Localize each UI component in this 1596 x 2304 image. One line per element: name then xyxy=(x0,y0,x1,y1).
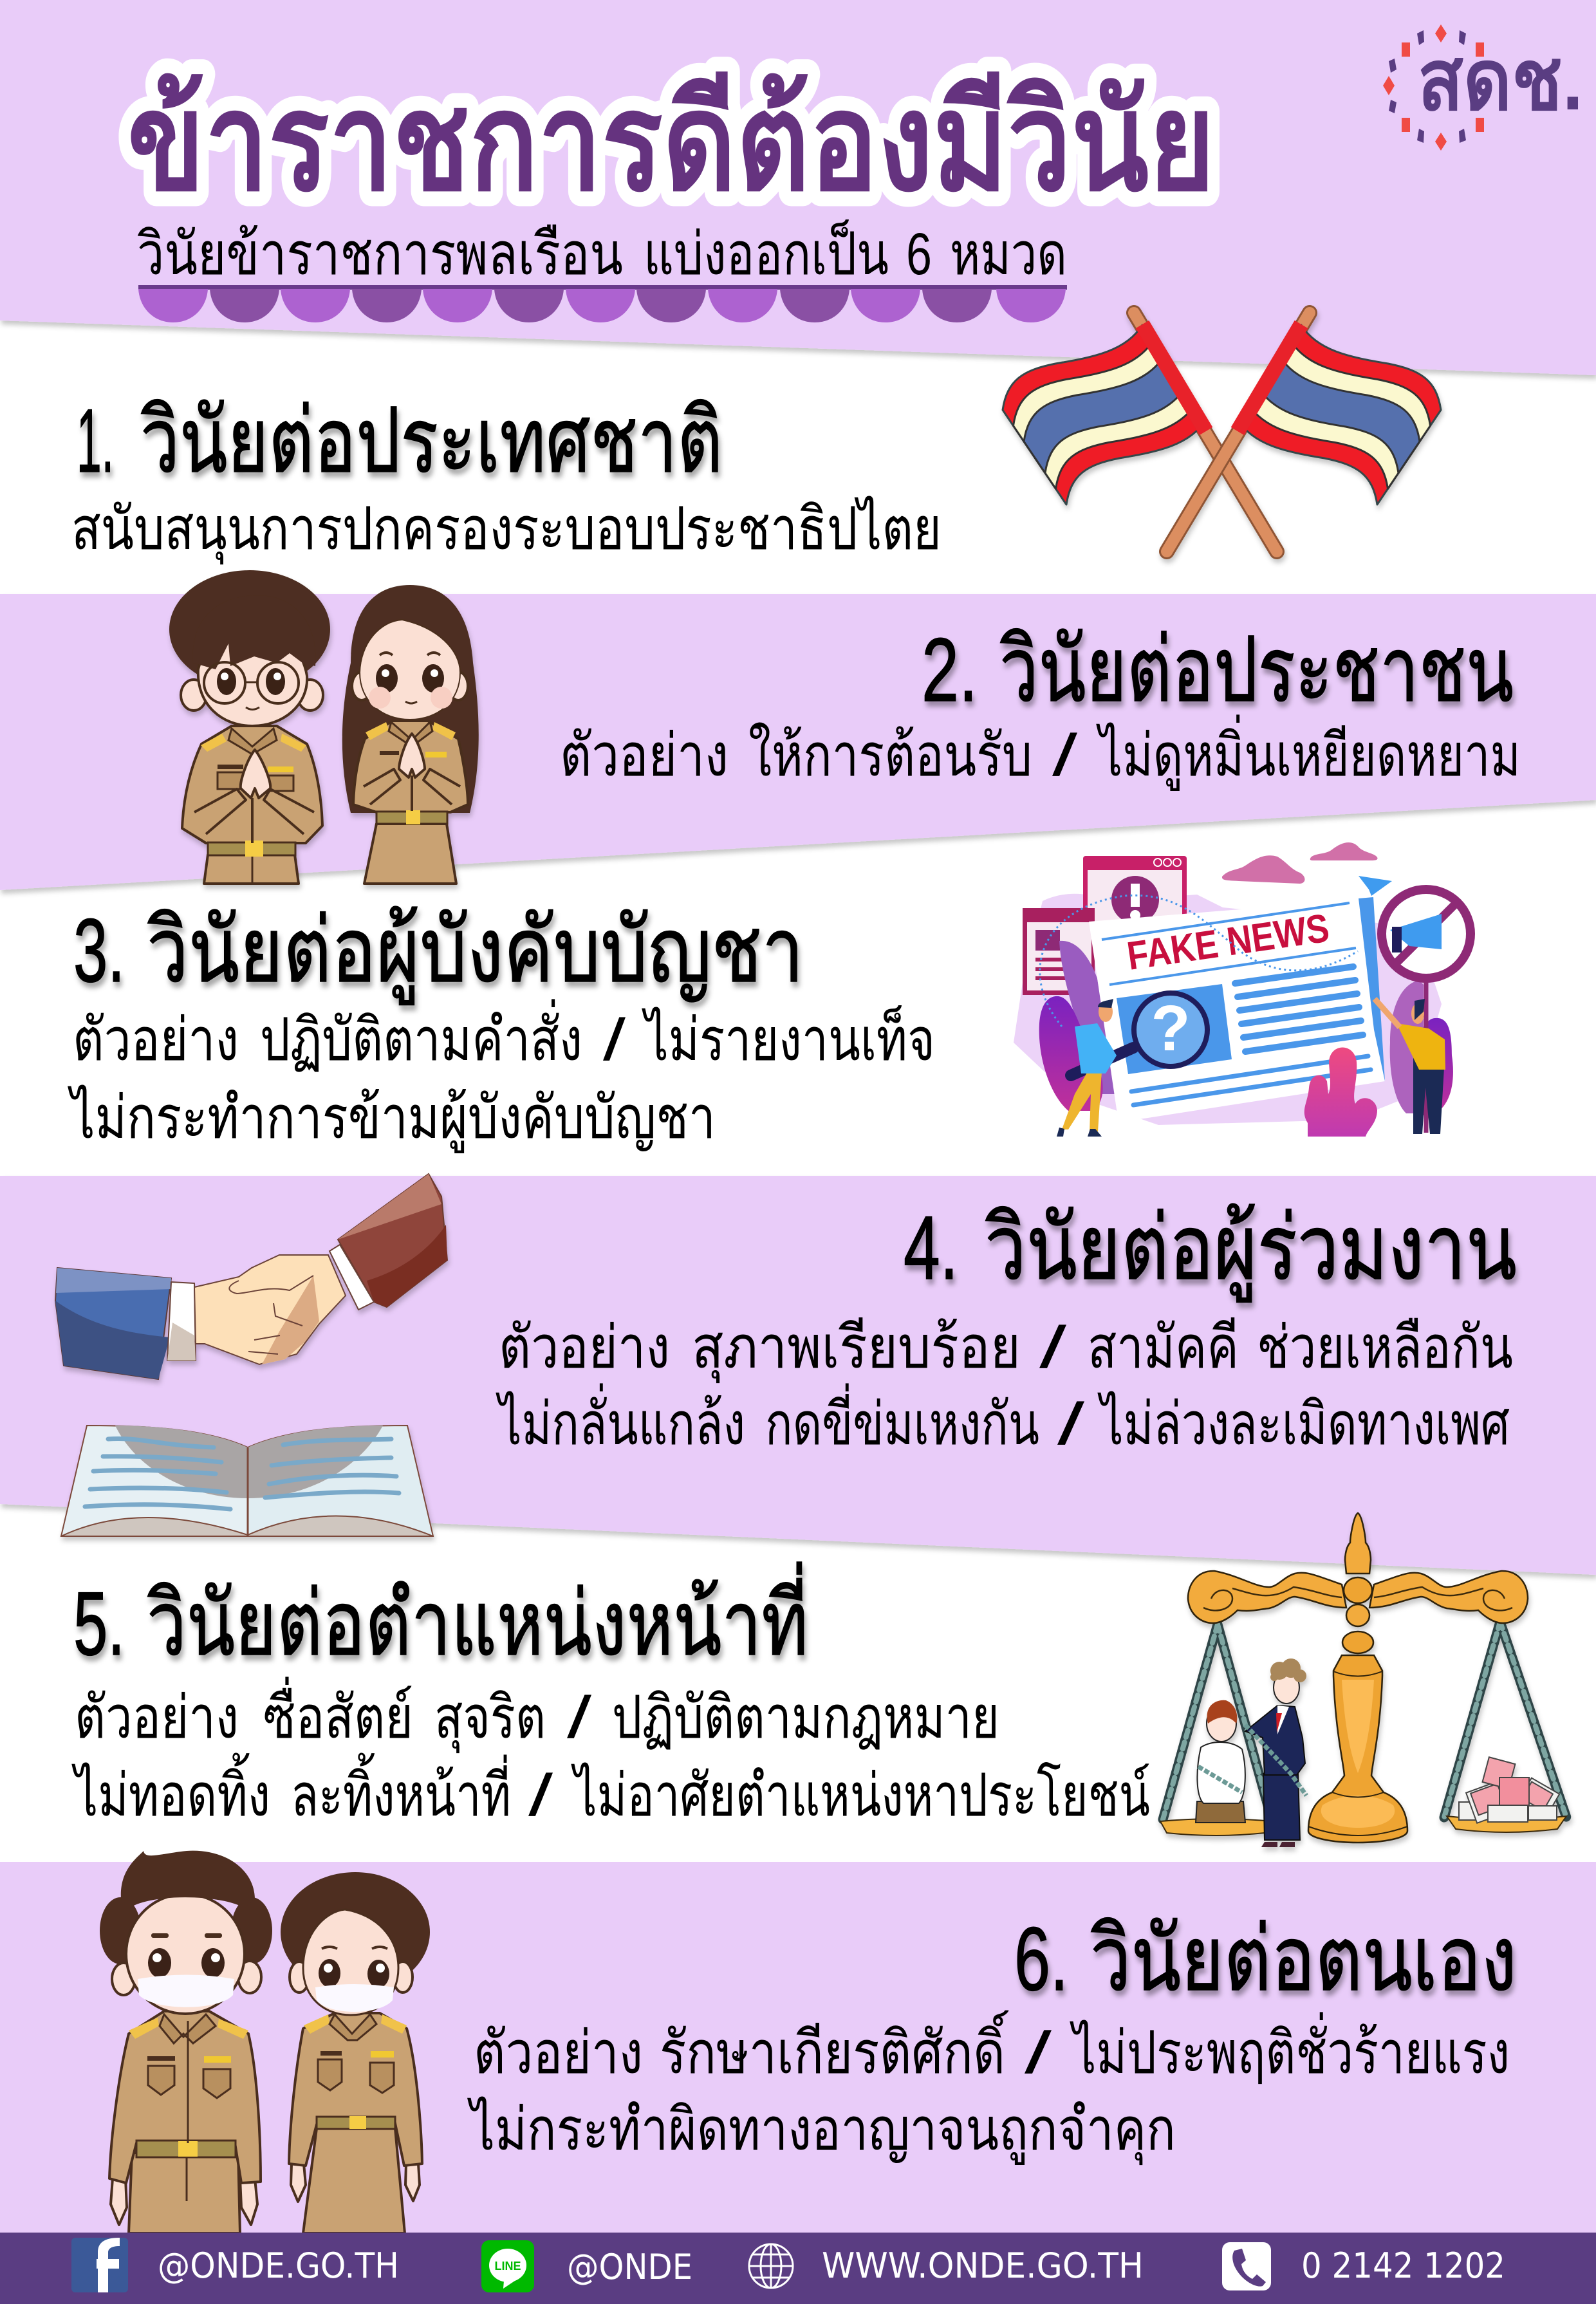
text: section 5 body line 1: ตัวอย่าง xyxy=(75,1685,239,1751)
text: line handle: @ONDE xyxy=(567,2247,692,2287)
chains xyxy=(1163,1622,1566,1819)
icon: phone xyxy=(1222,2242,1271,2290)
subtitle: วินัยข้าราชการพลเรือน xyxy=(137,221,623,287)
subtitle: หมวด xyxy=(950,221,1067,287)
text: section 6 body line 2: ไม่กระทำผิดทางอาญาจนถูกจำคุก xyxy=(467,2097,1176,2166)
subtitle: 6 xyxy=(906,221,932,287)
picture box xyxy=(1117,984,1232,1074)
icon: line xyxy=(481,2240,534,2292)
text: section 5 body line 2 xyxy=(71,1752,1150,1828)
heading 5: วินัยต่อตำแหน่งหน้าที่ xyxy=(147,1562,808,1674)
title: ข้าราชการดีต้องมีวินัย xyxy=(127,66,1215,218)
central column xyxy=(1345,1513,1371,1574)
text: section 5 body line 2: ไม่ทอดทิ้ง xyxy=(71,1752,270,1828)
masked woman xyxy=(281,1872,430,2233)
text: section 2 body: ให้การต้อนรับ xyxy=(748,723,1032,788)
heading 3: 3. xyxy=(73,900,125,1001)
heading 5 xyxy=(73,1562,808,1674)
open book xyxy=(61,1426,433,1536)
no megaphone sign xyxy=(1382,889,1471,1133)
boy with glasses xyxy=(169,570,330,884)
text: section 2 body: / xyxy=(1052,723,1078,788)
text: website: WWW.ONDE.GO.TH xyxy=(822,2245,1144,2286)
text: section 5 body line 2: / xyxy=(528,1763,553,1828)
logo: ONDE xyxy=(1383,24,1583,151)
text: section 5 body line 1: / xyxy=(567,1685,592,1751)
text: section 5 body line 1 xyxy=(75,1677,999,1754)
newspaper xyxy=(1089,900,1385,1122)
text: section 3 body line 1: ปฏิบัติตามคำสั่ง xyxy=(260,999,582,1073)
text: section 4 body line 2: / xyxy=(1057,1391,1085,1457)
illustration: fake news xyxy=(1014,842,1471,1137)
text: facebook handle: @ONDE.GO.TH xyxy=(158,2245,399,2286)
clouds xyxy=(1222,855,1305,884)
white cuff xyxy=(167,1282,196,1361)
subtitle xyxy=(137,219,1067,287)
icon: line: LINE xyxy=(494,2260,521,2272)
icon: globe xyxy=(749,2244,793,2288)
headline: FAKE NEWS xyxy=(1124,906,1332,979)
text: section 2 body xyxy=(560,714,1521,791)
panel: discipline 2 band xyxy=(0,594,1596,890)
red sleeve xyxy=(338,1174,447,1307)
scale pans xyxy=(1160,1819,1272,1835)
text: section 3 body line 1 xyxy=(73,999,935,1073)
text: section 4 body line 1: / xyxy=(1039,1315,1067,1380)
icon: facebook xyxy=(71,2238,128,2292)
money pile xyxy=(1459,1757,1559,1823)
text: section 5 body line 2: ไม่อาศัยตำแหน่งหาประโยชน์ xyxy=(571,1762,1150,1828)
flag poles xyxy=(1134,313,1310,552)
text: section 5 body line 1: ซื่อสัตย์ xyxy=(263,1677,413,1751)
suited man xyxy=(1245,1658,1306,1847)
pink plant xyxy=(1304,1048,1377,1137)
footer bar xyxy=(0,2233,1596,2304)
heading 1: 1. xyxy=(77,390,114,491)
illustration: handshake xyxy=(55,1174,447,1536)
article lines xyxy=(1131,967,1371,1105)
panel: discipline 4 band xyxy=(0,1176,1596,1575)
illustration: crossed Thai flags xyxy=(1003,313,1441,552)
subtitle: แบ่งออกเป็น xyxy=(644,219,889,287)
text: section 4 body line 1: ช่วยเหลือกัน xyxy=(1257,1315,1513,1380)
cloud small xyxy=(1310,842,1378,860)
text: phone number: 0 2142 1202 xyxy=(1301,2245,1505,2286)
text: section 5 body line 1: สุจริต xyxy=(434,1685,546,1754)
panel: discipline 6 band xyxy=(0,1862,1596,2233)
man with sign xyxy=(1375,999,1445,1134)
illustration: masked civil servants xyxy=(100,1851,430,2233)
text: section 4 body line 1 xyxy=(499,1315,1513,1384)
magnifier: ? xyxy=(1151,992,1191,1064)
alert window xyxy=(1083,856,1187,941)
text: section 4 body line 2 xyxy=(496,1383,1510,1457)
text: section 4 body line 2: กดขี่ข่มเหงกัน xyxy=(765,1383,1039,1457)
text: section 3 body line 1: ไม่รายงานเท็จ xyxy=(641,1005,935,1073)
text: section 6 body line 1: / xyxy=(1025,2020,1052,2086)
heading 5: 5. xyxy=(73,1573,125,1674)
text: section 4 body line 2: ไม่กลั่นแกล้ง xyxy=(496,1383,745,1457)
chained boy xyxy=(1196,1700,1245,1823)
text: section 6 body line 1 xyxy=(474,2010,1510,2086)
document window xyxy=(1023,908,1095,995)
masked man xyxy=(100,1851,272,2233)
text: section 6 body line 1: รักษาเกียรติศักดิ์ xyxy=(660,2010,1009,2086)
decorative scalloped underline xyxy=(138,285,1067,322)
text: section 1 body: สนับสนุนการปกครองระบอบประชาธิปไตย xyxy=(71,496,942,565)
background blobs xyxy=(1014,894,1442,1125)
girl xyxy=(342,585,479,884)
text: section 5 body line 1: ปฏิบัติตามกฎหมาย xyxy=(612,1685,999,1751)
heading 3: วินัยต่อผู้บังคับบัญชา xyxy=(147,900,804,1005)
text: section 3 body line 1: ตัวอย่าง xyxy=(73,1007,239,1073)
dotted arc xyxy=(1040,895,1358,1027)
right flag xyxy=(1238,324,1441,505)
heading 1: วินัยต่อประเทศชาติ xyxy=(140,390,723,491)
text: section 6 body line 1: ตัวอย่าง xyxy=(474,2020,643,2086)
beam xyxy=(1188,1571,1528,1623)
heading 4: 4. xyxy=(904,1197,958,1298)
text: section 3 body line 1: / xyxy=(603,1007,626,1073)
clasped hands xyxy=(194,1255,346,1364)
panel: header band xyxy=(0,0,1596,375)
text: section 4 body line 1: สามัคคี xyxy=(1088,1315,1239,1380)
text: section 4 body line 1: สุภาพเรียบร้อย xyxy=(692,1315,1021,1384)
heading 2: 2. xyxy=(922,619,978,720)
plants and leaves xyxy=(1059,941,1117,1094)
magnifier xyxy=(1071,992,1207,1075)
illustration: civil servants greeting xyxy=(169,570,479,884)
left flag xyxy=(1003,324,1206,505)
heading 6: 6. xyxy=(1014,1908,1068,2009)
illustration: scales of justice xyxy=(1160,1513,1566,1847)
text: section 3 body line 2: ไม่กระทำการข้ามผู้บังคับบัญชา xyxy=(67,1085,716,1153)
blue sleeve xyxy=(55,1268,171,1379)
text: section 4 body line 1: ตัวอย่าง xyxy=(499,1315,670,1380)
text: section 5 body line 2: ละทิ้งหน้าที่ xyxy=(291,1752,511,1828)
man with magnifier xyxy=(1057,999,1117,1137)
text: section 2 body: ตัวอย่าง xyxy=(560,723,728,788)
